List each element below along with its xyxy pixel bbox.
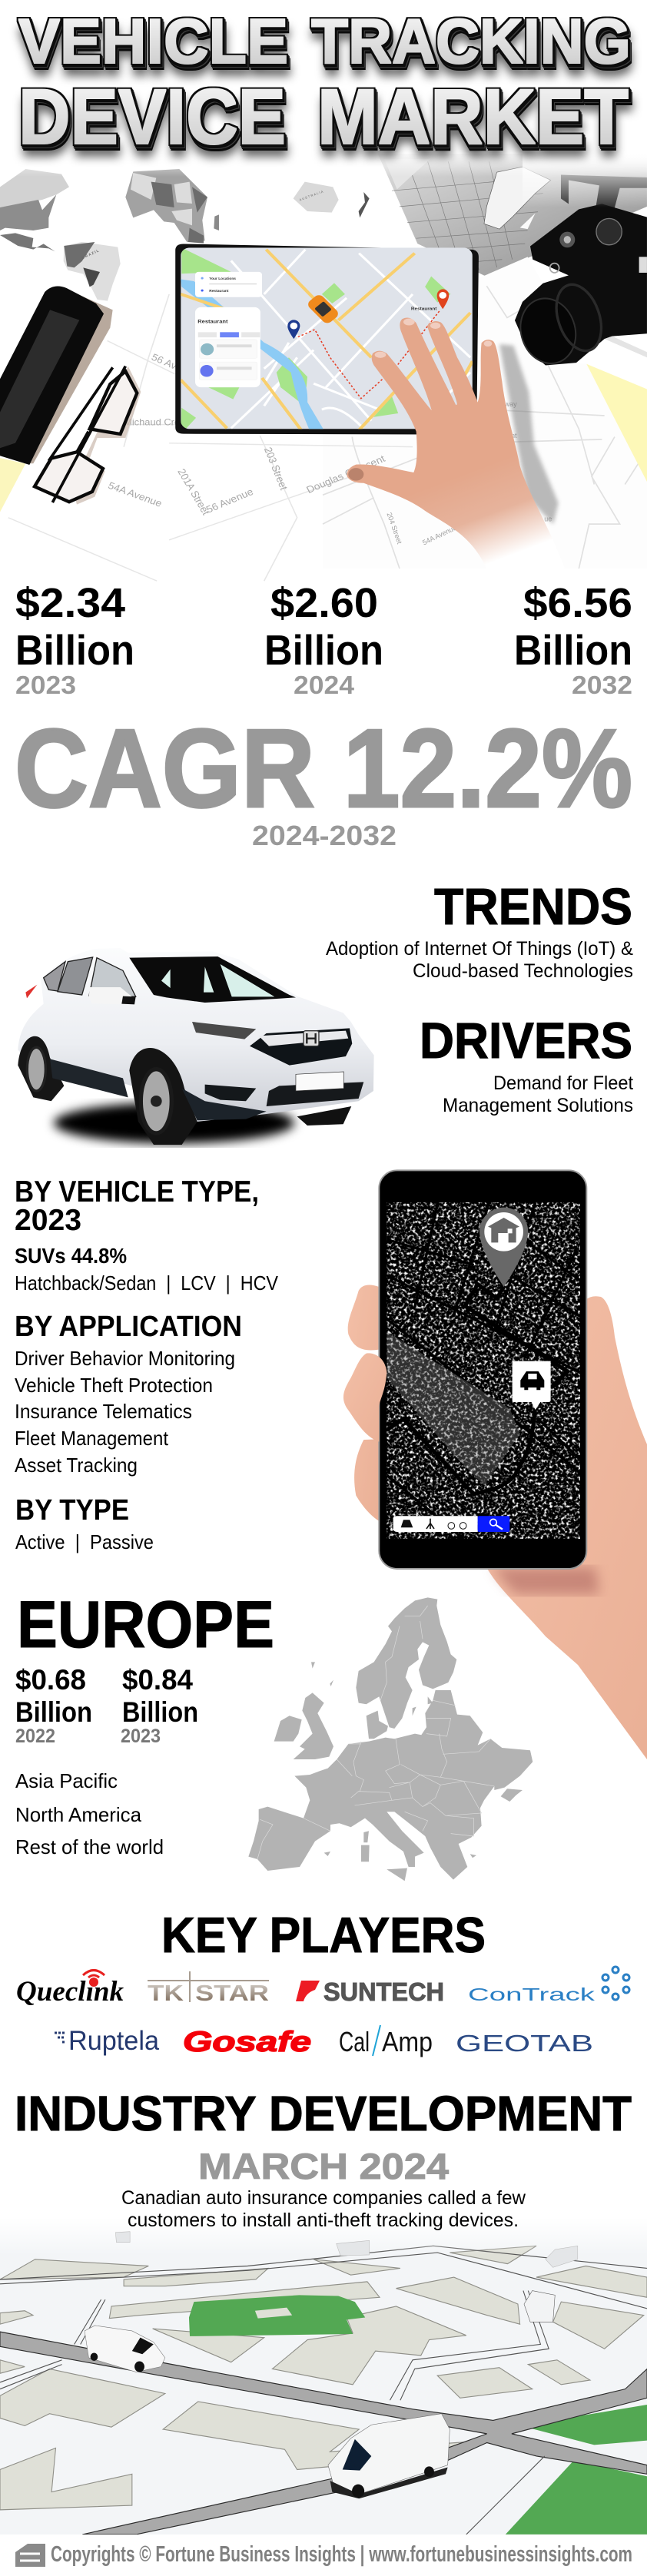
blue pin — [287, 320, 300, 339]
left street labels: Michaud Crescent — [124, 417, 204, 427]
stat: 2023 market value: 2023 — [15, 671, 76, 699]
front wheel — [129, 1048, 197, 1145]
restaurant panel — [195, 307, 260, 387]
front finger — [343, 1353, 387, 1442]
Europe 2022 value: $0.68 — [15, 1664, 86, 1696]
Europe 2023 value — [121, 1664, 198, 1747]
van on left road — [85, 2326, 165, 2372]
Europe 2023 value: Billion — [122, 1696, 198, 1728]
tablet map screen — [181, 247, 473, 430]
by vehicle type: SUVs 44.8% — [15, 1244, 127, 1268]
title — [18, 5, 631, 161]
other regions: Rest of the world — [15, 1835, 164, 1858]
logo: Geotab: GEOTAB — [456, 2030, 593, 2057]
Europe 2022 value — [15, 1664, 92, 1747]
description: Canadian auto insurance companies called a few — [121, 2187, 526, 2209]
left street labels: 56 Avenue — [150, 351, 201, 380]
description — [121, 2187, 526, 2231]
stat: 2032 market value: 2032 — [572, 671, 632, 699]
stat: 2032 market value: $6.56 — [523, 580, 632, 626]
trends: Adoption of Internet Of Things (IoT) & — [326, 938, 633, 960]
tablet: Restaurant — [411, 307, 436, 311]
logo: TKSTAR: TK — [148, 1981, 184, 2006]
street map lines: 204 Street — [385, 512, 403, 545]
title: VEHICLE — [18, 5, 288, 77]
city map with delivery vans — [0, 2219, 647, 2535]
trends — [326, 878, 633, 982]
paper map sheet — [378, 154, 647, 277]
Europe 2022 value: Billion — [15, 1696, 92, 1728]
stat: 2032 market value: Billion — [514, 626, 632, 674]
hand holding phone — [343, 1170, 647, 1759]
key players heading: KEY PLAYERS — [161, 1907, 486, 1963]
location panel: Restaurant — [209, 289, 229, 293]
left street labels: 203 Street — [262, 446, 290, 492]
back fingers — [348, 1285, 379, 1521]
hero illustration: map, tablet, hand, camera and glasses — [0, 150, 647, 581]
rear wheel — [18, 1036, 64, 1101]
other regions: North America — [15, 1803, 142, 1826]
by vehicle type — [15, 1175, 279, 1295]
by type — [15, 1494, 154, 1553]
small vans far — [115, 2232, 578, 2267]
left street labels: 54A Avenue — [106, 479, 164, 509]
glasses — [35, 366, 141, 505]
Europe title: EUROPE — [17, 1588, 274, 1662]
map of Europe — [248, 1597, 533, 1881]
tablet — [175, 244, 479, 435]
logo: CalAmp: Amp — [382, 2026, 433, 2057]
by type: Active | Passive — [15, 1530, 154, 1553]
logo: ConTrack — [468, 1967, 629, 2004]
logo: CalAmp — [339, 2025, 433, 2057]
logo: ConTrack: ConTrack — [468, 1984, 596, 2004]
street map lines: way — [504, 400, 517, 408]
orange car — [306, 293, 340, 325]
other regions: Asia Pacific — [15, 1769, 118, 1792]
icon: Fortune Business Insights mark — [15, 2544, 45, 2567]
icon: white SUV — [18, 948, 374, 1145]
hand on tablet — [347, 318, 565, 569]
logo: Queclink: Queclink — [16, 1976, 124, 2007]
phone body — [379, 1170, 586, 1569]
top fade — [0, 2219, 647, 2255]
other regions — [15, 1769, 164, 1858]
CAGR period: 2024-2032 — [252, 820, 396, 851]
stat: 2023 market value — [15, 580, 134, 699]
drivers: DRIVERS — [420, 1012, 632, 1069]
location panel — [195, 272, 262, 297]
green park — [189, 2295, 647, 2535]
world map: BRAZIL — [81, 248, 100, 260]
top fade over the maps — [0, 150, 647, 177]
by application — [15, 1311, 242, 1477]
logo: Gosafe: Gosafe — [183, 2026, 311, 2057]
phone aerial map — [387, 1202, 580, 1539]
world map — [0, 169, 370, 301]
description: customers to install anti-theft tracking devices. — [128, 2210, 519, 2231]
street map lines: nt — [511, 432, 517, 439]
red pin — [437, 289, 449, 309]
stat: 2024 market value: Billion — [264, 626, 383, 674]
stat: 2024 market value: $2.60 — [270, 580, 378, 626]
palm and thumb — [486, 1296, 647, 1759]
stat: 2032 market value — [514, 580, 632, 699]
by vehicle type: Hatchback/Sedan | LCV | HCV — [15, 1271, 279, 1295]
van on right road — [524, 2291, 555, 2322]
industry development heading: INDUSTRY DEVELOPMENT — [15, 2086, 632, 2141]
by vehicle type: BY VEHICLE TYPE, — [15, 1175, 259, 1208]
title: TRACKING — [311, 5, 631, 77]
trends: Cloud-based Technologies — [413, 960, 633, 982]
by application: Asset Tracking — [15, 1454, 138, 1477]
by application: Insurance Telematics — [15, 1400, 192, 1423]
city blocks — [0, 2246, 647, 2510]
street map lines: ue — [544, 516, 552, 523]
left street labels: 56 Avenue — [204, 486, 255, 515]
roads — [0, 2332, 647, 2535]
logo: TKSTAR — [148, 1971, 269, 2006]
by vehicle type: 2023 — [15, 1204, 81, 1237]
by application: Vehicle Theft Protection — [15, 1374, 213, 1397]
Europe 2022 value: 2022 — [15, 1726, 55, 1747]
stat: 2024 market value: 2024 — [294, 671, 355, 699]
left street labels: 201A Street — [175, 467, 212, 517]
camera top fade — [523, 154, 647, 207]
location panel: Your Locations — [209, 277, 236, 280]
street map lines — [323, 257, 647, 569]
left street labels: Douglas Crescent — [304, 453, 387, 496]
stat: 2024 market value — [264, 580, 383, 699]
by application: Driver Behavior Monitoring — [15, 1347, 235, 1370]
Europe 2023 value: 2023 — [121, 1726, 161, 1747]
map search bar — [393, 1516, 509, 1532]
by application: BY APPLICATION — [15, 1311, 242, 1343]
stat: 2023 market value: Billion — [15, 626, 134, 674]
logo: Suntech: SUNTECH — [324, 1978, 444, 2006]
logo: Ruptela: Ruptela — [68, 2026, 160, 2056]
home location pin — [479, 1208, 528, 1287]
logo: TKSTAR: STAR — [195, 1981, 269, 2006]
Europe 2023 value: $0.84 — [122, 1664, 193, 1696]
by type: BY TYPE — [15, 1494, 129, 1527]
logo: CalAmp: Cal — [339, 2026, 370, 2057]
title: MARKET — [317, 73, 629, 161]
left street labels — [0, 294, 413, 581]
car callout — [513, 1361, 551, 1410]
restaurant panel: Restaurant — [197, 319, 228, 325]
world map: AUSTRALIA — [299, 189, 324, 202]
drivers: Demand for Fleet — [493, 1073, 633, 1094]
glasses case — [0, 287, 113, 465]
stat: 2023 market value: $2.34 — [15, 580, 125, 626]
van in foreground — [328, 2414, 450, 2498]
by application: Fleet Management — [15, 1427, 169, 1450]
drivers — [420, 1012, 633, 1116]
footer — [0, 2535, 647, 2576]
camera — [512, 175, 647, 372]
drivers: Management Solutions — [443, 1095, 633, 1116]
street map lines: 54A Avenue — [421, 523, 458, 547]
trends: TRENDS — [434, 878, 632, 936]
title: DEVICE — [18, 73, 286, 161]
date: MARCH 2024 — [198, 2146, 449, 2186]
